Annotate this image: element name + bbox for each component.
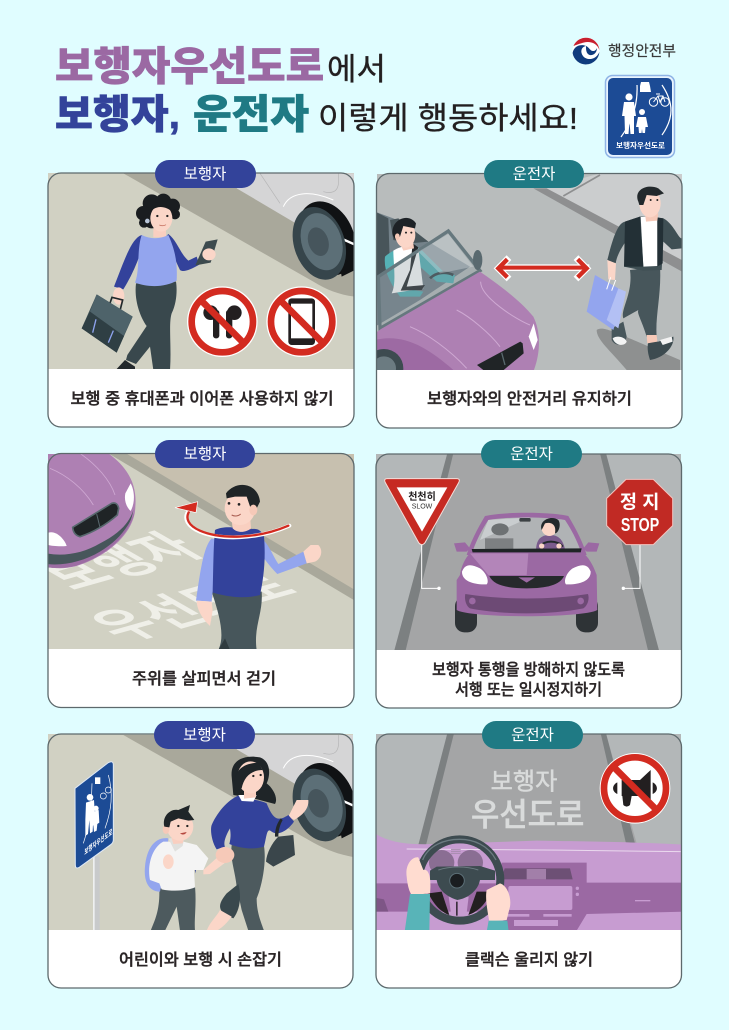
dashboard	[375, 833, 683, 933]
caption: 서행 또는 일시정지하기	[455, 681, 602, 699]
caption: 보행 중 휴대폰과 이어폰 사용하지 않기	[70, 390, 334, 408]
driver	[385, 218, 455, 297]
panel: driver slow or stop	[375, 452, 685, 708]
road marking text	[48, 530, 297, 639]
icon: no horn	[600, 753, 670, 824]
slow sign: SLOW	[412, 504, 433, 511]
child	[145, 805, 234, 931]
pedestrian priority road sign	[606, 76, 674, 158]
label: driver	[484, 160, 584, 188]
label: pedestrian: 보행자	[183, 726, 226, 744]
ministry logo: 행정안전부	[608, 43, 676, 60]
caption: 어린이와 보행 시 손잡기	[119, 951, 282, 969]
caption	[432, 661, 625, 699]
panel: driver keep distance	[365, 172, 685, 428]
caption: 보행자 통행을 방해하지 않도록	[432, 661, 625, 679]
arrow: safe distance	[498, 259, 587, 277]
title: 이렇게 행동하세요!	[318, 101, 578, 136]
steering wheel and hands	[405, 839, 510, 932]
icon: no phone	[266, 286, 337, 357]
title: 에서	[327, 52, 386, 87]
icon: no earphones	[187, 286, 258, 357]
title: 보행자우선도로	[55, 45, 324, 89]
car interior and seat	[375, 212, 470, 327]
mother	[207, 757, 308, 931]
ministry logo	[572, 38, 676, 64]
caption: 주위를 살피면서 걷기	[132, 670, 276, 688]
label: driver: 운전자	[511, 726, 554, 744]
caption: 보행자와의 안전거리 유지하기	[427, 390, 632, 408]
man with shopping bags	[587, 187, 682, 360]
label: pedestrian	[155, 440, 255, 468]
title: 보행자,	[55, 93, 180, 137]
label: pedestrian	[154, 721, 255, 749]
road marking text: 우선도로	[76, 565, 311, 648]
label: driver: 운전자	[513, 165, 555, 183]
man looking around	[196, 485, 321, 650]
panel: driver no horn	[375, 732, 685, 988]
illustration: pedestrian looking around	[26, 450, 357, 650]
pedestrian priority road sign: 보행자우선도로	[616, 140, 665, 150]
slow sign	[385, 479, 459, 590]
title: 운전자	[193, 93, 309, 137]
woman walking	[113, 194, 218, 370]
caption: 클랙슨 울리지 않기	[465, 951, 593, 969]
illustration: driver view of road	[375, 732, 685, 933]
label: driver	[482, 721, 583, 749]
stop sign: 정 지	[620, 491, 659, 512]
panel: pedestrian hold hands with child	[47, 730, 366, 988]
car front	[47, 453, 136, 568]
illustration: pedestrian with phone beside car	[47, 170, 366, 370]
illustration: car approaching with signs	[375, 452, 685, 652]
label: driver: 운전자	[510, 445, 553, 463]
label: pedestrian	[155, 160, 256, 188]
road marking text	[471, 768, 584, 832]
stop sign	[607, 479, 673, 590]
slow sign: 천천히	[408, 490, 436, 503]
label: driver	[481, 440, 582, 468]
stop sign: STOP	[621, 514, 659, 535]
title	[55, 45, 578, 137]
road sign on pole	[75, 762, 113, 932]
windshield	[378, 231, 480, 328]
road marking text: 우선도로	[471, 796, 584, 832]
panel: pedestrian no phone or earphones	[47, 170, 366, 427]
panel: pedestrian look around	[26, 450, 357, 708]
label: pedestrian: 보행자	[184, 165, 226, 183]
purple car front view	[454, 513, 599, 632]
car hood	[377, 250, 539, 370]
road sign on pole: 보행자우선도로	[84, 826, 112, 857]
label: pedestrian: 보행자	[184, 445, 226, 463]
road marking text: 보행자	[491, 768, 557, 795]
arrow: look around	[175, 502, 289, 537]
illustration: convertible and pedestrian	[377, 174, 682, 370]
illustration: mother and child holding hands	[47, 730, 366, 933]
road marking text: 보행자	[26, 526, 217, 597]
briefcase	[82, 294, 133, 353]
